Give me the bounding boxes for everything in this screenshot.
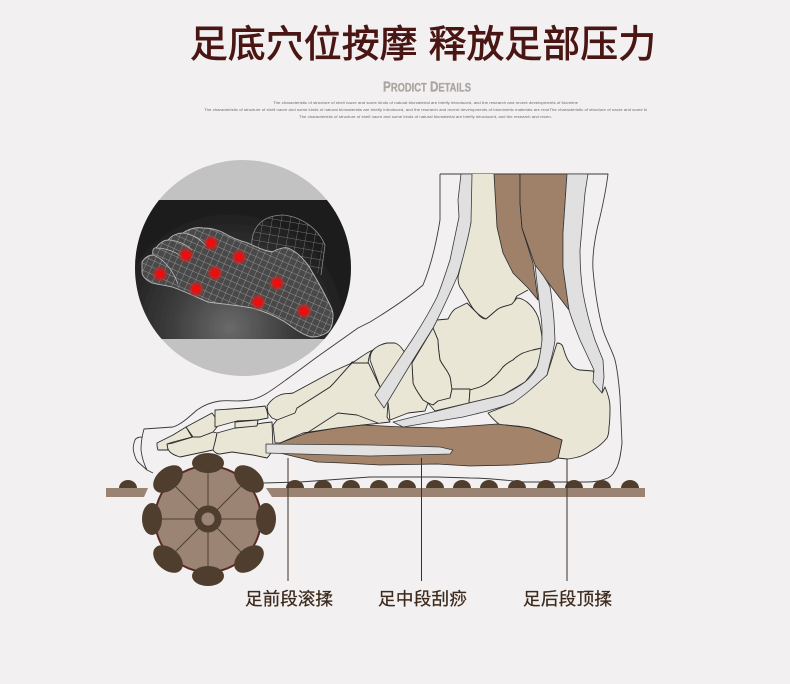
- roller nubs: [142, 453, 276, 586]
- pointer lines: [288, 458, 567, 581]
- foot anatomy diagram: [133, 174, 622, 483]
- big toe proximal phalanx: [213, 422, 273, 458]
- leg muscle rear: [520, 174, 569, 310]
- description text: [204, 100, 647, 119]
- metatarsal upper: [267, 363, 352, 420]
- description text: The characteristic of structure of shell nacre and some kinds of natural biomaterial are briefly introduced, and the research and recen.: [299, 114, 552, 119]
- inset: foot acupoint wireframe: [130, 160, 356, 376]
- label: forefoot: 足前段滚揉: [245, 589, 333, 609]
- mid tarsal bone: [469, 348, 542, 403]
- description text: The characteristic of structure of shell nacre and some kinds of natural biomaterials are briefly introduced, and the research and recent developments of biomimetic materials are reveThe characteristic of structure of nacre and some ki: [204, 107, 647, 112]
- small phalanx: [235, 420, 258, 428]
- calcaneus bone: [488, 343, 610, 459]
- ground bumps: [119, 480, 639, 488]
- metatarsal long lower: [273, 362, 390, 443]
- grey tendon inner curved: [393, 265, 555, 427]
- roller hub: [198, 509, 218, 529]
- navicular bone: [412, 328, 452, 405]
- grey tendon left: [375, 174, 472, 408]
- talus bone: [433, 298, 542, 390]
- ground strip left: [106, 488, 148, 497]
- cuboid bone: [428, 389, 470, 411]
- subtitle: product details: PRODICT DETAILS: [383, 78, 471, 96]
- plantar muscle: [280, 424, 562, 466]
- grey tendon right: [563, 174, 604, 393]
- label: rearfoot: 足后段顶揉: [523, 589, 612, 609]
- massage roller: [142, 453, 276, 586]
- small distal phalanx: [157, 427, 192, 450]
- inset dark panel: [130, 200, 356, 339]
- title: 足底穴位按摩 释放足部压力: [190, 23, 656, 65]
- roller body: [155, 466, 261, 572]
- upper metatarsal head: [352, 350, 373, 363]
- description text: The characteristic of structure of shell nacre and some kinds of natural biomaterial are briefly introduced, and the research and recent developments of biomime: [273, 100, 579, 105]
- foot wireframe: [142, 228, 333, 337]
- foot base: [142, 228, 333, 337]
- cuneiform bone: [370, 343, 428, 420]
- tibia bone: [458, 174, 528, 319]
- inset circle: [135, 160, 351, 376]
- roller spokes: [152, 463, 264, 575]
- toe separators: [153, 233, 206, 284]
- acupoint markers: [152, 234, 312, 320]
- proximal phalanx: [215, 406, 268, 427]
- ankle rim: [252, 215, 325, 275]
- label: midfoot: 足中段刮痧: [378, 589, 467, 609]
- ground strip right: [266, 488, 645, 497]
- ankle wireframe: [252, 215, 325, 275]
- big toe distal phalanx: [167, 432, 217, 457]
- leg muscle front: [494, 174, 538, 300]
- foot outline: [133, 174, 622, 483]
- metatarsal crease: [307, 413, 378, 433]
- tibia edge: [458, 222, 528, 319]
- middle phalanx: [186, 413, 217, 437]
- plantar tendon bar: [266, 444, 453, 456]
